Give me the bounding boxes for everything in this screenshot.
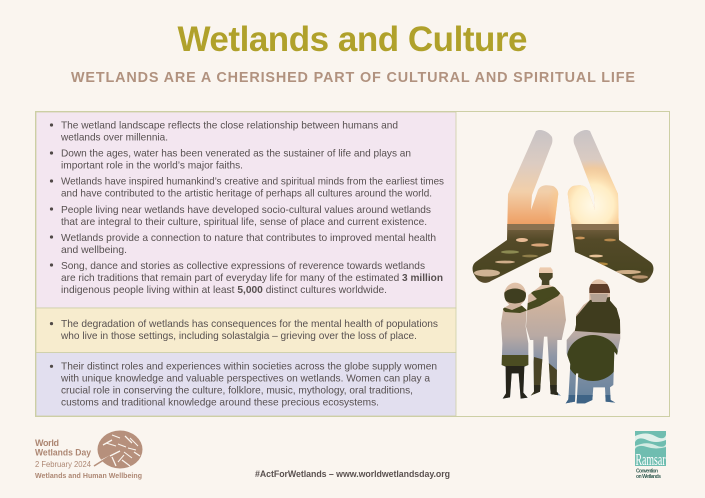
panel: degradation [36, 308, 456, 352]
bullet text: song and dance: are rich traditions that remain part of everyday life for many of the estimated 3 million [61, 273, 443, 284]
panel: cultural and spiritual values [36, 112, 456, 308]
bullet text: water and faiths: Down the ages, water has been venerated as the sustainer of life and plays an [61, 148, 411, 160]
logo text: 2 February 2024 [35, 459, 91, 469]
title: Wetlands and Culture [178, 20, 528, 59]
panel: degradation: who live in those settings, including solastalgia – grieving over the loss of place. [60, 331, 417, 342]
logo: Ramsar: Convention [636, 468, 658, 474]
panel: degradation: The degradation of wetlands has consequences for the mental health of populations [61, 319, 438, 330]
bullet text: socio-cultural values [50, 205, 431, 228]
bullet text: mental health: and wellbeing. [61, 245, 127, 256]
illustration: praying hands with wetland sunset [472, 130, 654, 283]
bullet text: song and dance: Song, dance and stories as collective expressions of reverence towards wetlands [61, 261, 425, 272]
wetland band: dark legs [502, 355, 528, 366]
wetland band: tree line over shoulders [500, 290, 562, 313]
subtitle: WETLANDS ARE A CHERISHED PART OF CULTURAL AND SPIRITUAL LIFE [71, 70, 635, 86]
bullet text: water and faiths: important role in the world’s major faiths. [61, 160, 243, 172]
logo text: World [35, 438, 59, 448]
bullet text: wetland landscape: The wetland landscape reflects the close relationship between humans and [61, 120, 398, 132]
panel: main frame [36, 112, 670, 416]
wetland band: heads [539, 273, 553, 285]
bullet text: song and dance [50, 261, 443, 296]
panel: women [36, 352, 456, 416]
bullet text: water and faiths [50, 148, 411, 172]
bullet text: wetland landscape [50, 120, 398, 144]
panel: women: with unique knowledge and valuable perspectives on wetlands. Women can play a [60, 374, 430, 385]
footer hashtag and website: #ActForWetlands – www.worldwetlandsday.org [255, 469, 450, 479]
panel: women: Their distinct roles and experiences within societies across the globe supply women [61, 362, 437, 373]
logo: Ramsar: on Wetlands [636, 474, 661, 480]
logo: World Wetlands Day [35, 430, 142, 480]
panel: women: crucial role in conserving the culture, folklore, music, mythology, oral traditions, [61, 386, 413, 397]
bullet text: mental health: Wetlands provide a connection to nature that contributes to improved mental health [61, 233, 436, 244]
bullet text: artistic heritage [50, 176, 444, 200]
panel: women: customs and traditional knowledge around these precious ecosystems. [61, 398, 379, 409]
bullet text: socio-cultural values: People living near wetlands have developed socio-cultural values around wetlands [61, 205, 431, 216]
logo text: Wetlands Day [35, 448, 91, 458]
logo: Ramsar: Ramsar [636, 450, 666, 469]
bullet text: artistic heritage: Wetlands have inspired humankind’s creative and spiritual minds from the earliest times [61, 176, 444, 188]
bullet text: artistic heritage: and have contributed to the artistic heritage of perhaps all cultures around the world. [61, 188, 432, 200]
bullet text: wetland landscape: wetlands over millennia. [60, 132, 168, 144]
icon: wetlands emblem [94, 430, 142, 468]
illustration: family silhouette with wetland scene [501, 267, 620, 404]
bullet text: song and dance: indigenous people living within at least 5,000 distinct cultures worldwide. [61, 285, 387, 296]
bullet text: mental health [50, 233, 436, 256]
logo text [35, 438, 142, 480]
logo: Ramsar [635, 431, 666, 480]
bullet text: socio-cultural values: that are integral to their culture, spiritual life, sense of place and current existence. [61, 217, 427, 228]
logo text: Wetlands and Human Wellbeing [35, 473, 142, 480]
wetland band: right figure dark torso [575, 297, 625, 334]
